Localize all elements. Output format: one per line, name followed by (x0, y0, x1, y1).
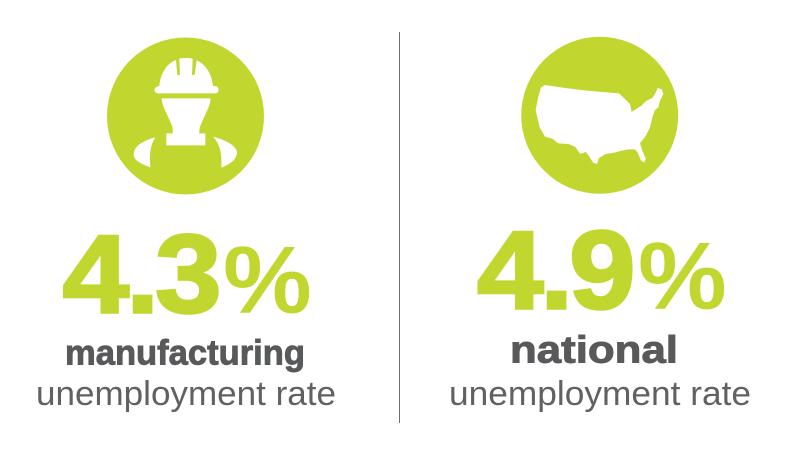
big number: 4.3%: % (223, 226, 312, 334)
label: national: national (510, 330, 678, 372)
big number: 4.3% (62, 213, 312, 337)
big number: 4.9%: % (638, 222, 727, 330)
big number: 4.3%: 4 (62, 213, 129, 337)
big number: 4.9%: . (540, 209, 573, 333)
label: manufacturing: manufacturing (65, 334, 305, 372)
label: unemployment rate: unemployment rate (449, 375, 751, 413)
big number: 4.9%: 4 (477, 209, 544, 333)
icon: map of the United States (521, 37, 678, 194)
panel: national unemployment (449, 37, 751, 413)
icon: construction worker (107, 38, 264, 194)
big number: 4.3%: . (126, 213, 159, 337)
panel: manufacturing unemployment (36, 38, 336, 413)
divider (399, 32, 400, 423)
big number: 4.9% (477, 209, 727, 333)
big number: 4.9%: 9 (569, 209, 636, 333)
big number: 4.3%: 3 (155, 213, 222, 337)
label: unemployment rate: unemployment rate (36, 375, 336, 413)
